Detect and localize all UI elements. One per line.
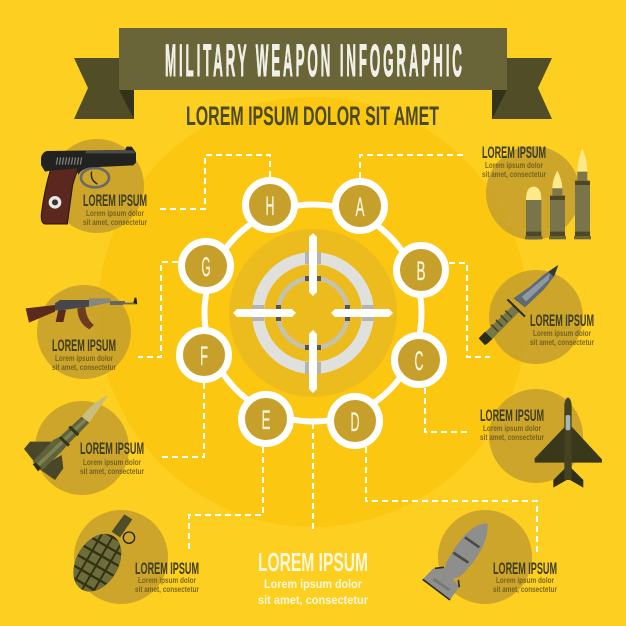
icon: knife	[479, 265, 558, 345]
label text: Lorem ipsum dolor	[138, 576, 196, 585]
banner main band	[119, 28, 507, 90]
label text	[482, 144, 546, 179]
icon: bomb	[423, 523, 488, 600]
node H: H	[266, 191, 274, 221]
label text: Lorem ipsum dolor	[533, 329, 591, 338]
panel: bomb	[423, 510, 557, 604]
label text	[80, 440, 144, 476]
node D	[330, 396, 380, 446]
label text	[135, 560, 199, 594]
label text: sit amet, consectetur	[80, 467, 144, 476]
node D: D	[350, 407, 360, 437]
center text block	[258, 547, 368, 607]
center text block: Lorem ipsum dolor	[264, 579, 362, 591]
panel: grenade	[62, 510, 199, 604]
node F	[180, 330, 228, 380]
label text: Lorem ipsum dolor	[485, 161, 543, 170]
panel: knife	[479, 265, 594, 364]
label text: LOREM IPSUM	[52, 337, 116, 355]
node C: C	[414, 346, 424, 376]
title banner	[74, 28, 552, 119]
label text: LOREM IPSUM	[482, 144, 546, 162]
label text: sit amet, consectetur	[482, 170, 546, 179]
central ring with nodes	[180, 180, 446, 446]
label text: Lorem ipsum dolor	[86, 209, 144, 218]
icon: bullets	[525, 148, 591, 239]
label text	[83, 192, 147, 227]
panel: pistol	[41, 139, 147, 233]
icon: missile	[24, 395, 108, 480]
label text	[52, 337, 116, 372]
banner left tail	[74, 58, 134, 119]
label text: LOREM IPSUM	[493, 560, 557, 578]
node E: E	[262, 405, 270, 435]
label text: LOREM IPSUM	[480, 407, 544, 425]
title: MILITARY WEAPON INFOGRAPHIC	[165, 37, 462, 87]
dashed connectors	[138, 155, 537, 552]
icon: jet	[535, 397, 602, 488]
node E	[242, 394, 290, 444]
label text: sit amet, consectetur	[530, 338, 594, 347]
label text: Lorem ipsum dolor	[496, 576, 554, 585]
center text block: LOREM IPSUM	[258, 547, 368, 577]
banner right tail	[492, 58, 552, 119]
panel: rifle	[26, 285, 137, 379]
icon: grenade	[73, 514, 136, 592]
node C	[394, 336, 444, 384]
node G: G	[202, 252, 210, 282]
label text	[480, 407, 544, 442]
label text: sit amet, consectetur	[493, 585, 557, 594]
crosshair target	[229, 229, 397, 397]
node H	[246, 180, 294, 230]
node G	[182, 242, 230, 290]
label text: sit amet, consectetur	[480, 433, 544, 442]
subtitle: LOREM IPSUM DOLOR SIT AMET	[186, 101, 439, 131]
label text: LOREM IPSUM	[135, 560, 199, 578]
node A	[336, 182, 384, 230]
label text: sit amet, consectetur	[83, 218, 147, 227]
panel: missile	[24, 395, 144, 495]
banner left fold	[119, 90, 134, 119]
label text: Lorem ipsum dolor	[83, 458, 141, 467]
label text: sit amet, consectetur	[52, 363, 116, 372]
label text: Lorem ipsum dolor	[483, 424, 541, 433]
label text: LOREM IPSUM	[80, 440, 144, 458]
label text: LOREM IPSUM	[83, 192, 147, 210]
center text block: sit amet, consectetur	[258, 595, 368, 607]
icon: rifle	[26, 298, 137, 329]
icon: pistol	[41, 147, 136, 224]
label text: Lorem ipsum dolor	[55, 354, 113, 363]
panel: bullets	[482, 144, 591, 240]
node B: B	[416, 256, 426, 286]
node B	[396, 246, 446, 294]
node A: A	[356, 192, 364, 222]
banner right fold	[492, 90, 507, 119]
large background circle	[98, 97, 528, 527]
node F: F	[200, 341, 208, 371]
label text: sit amet, consectetur	[135, 585, 199, 594]
label text	[493, 560, 557, 594]
panel: jet	[480, 389, 602, 488]
label text	[530, 312, 594, 347]
